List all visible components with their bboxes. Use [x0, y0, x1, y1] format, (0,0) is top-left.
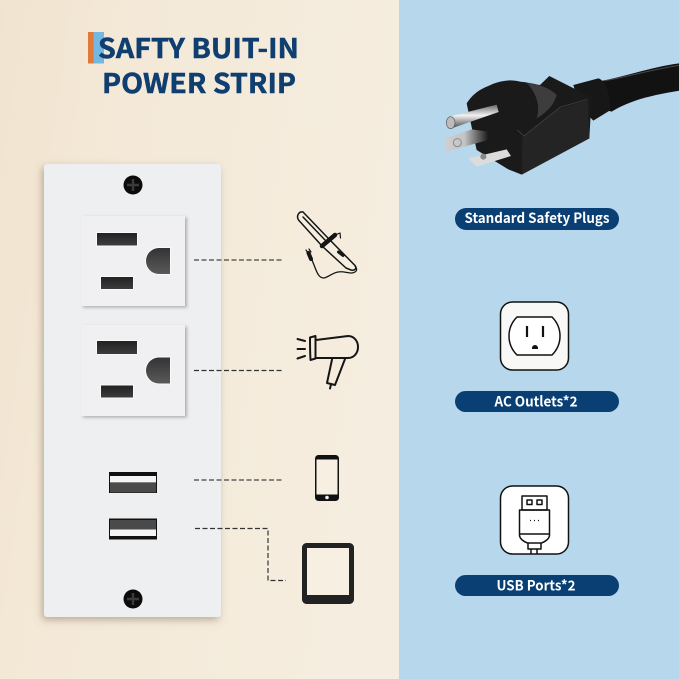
icon: USB connector	[500, 486, 568, 554]
title line 2: POWER STRIP	[102, 62, 296, 101]
top blade	[445, 129, 488, 152]
cord collar	[573, 78, 611, 121]
side face	[522, 100, 589, 175]
outlet 2	[81, 325, 185, 416]
icon: AC outlet	[500, 302, 568, 370]
right background panel	[399, 0, 679, 679]
connector: outlet 2 to hair dryer	[194, 370, 283, 372]
plug head	[467, 76, 592, 175]
outlet 1	[81, 216, 185, 306]
icon: phone	[315, 455, 339, 501]
label: Standard Safety Plugs: Standard Safety Plugs	[464, 208, 610, 228]
bottom screw	[124, 590, 142, 608]
label: AC Outlets*2	[455, 391, 619, 412]
icon: power plug photo	[445, 63, 679, 175]
title	[88, 27, 299, 101]
icon: tablet	[304, 546, 352, 602]
top screw	[124, 176, 142, 194]
connector: USB 1 to phone	[194, 479, 283, 481]
icon: hair dryer	[298, 336, 358, 388]
ground pin	[449, 105, 499, 129]
left background panel	[0, 0, 399, 679]
label: USB Ports*2	[455, 575, 619, 596]
title accent mark	[88, 32, 104, 64]
icon: curling iron	[298, 212, 357, 278]
label: AC Outlets*2: AC Outlets*2	[494, 392, 578, 412]
cord	[598, 63, 679, 112]
USB port 1	[109, 472, 157, 493]
power strip faceplate	[44, 164, 221, 617]
connector: outlet 1 to curling iron	[194, 259, 283, 261]
label: USB Ports*2: USB Ports*2	[496, 576, 576, 596]
connector: USB 2 to tablet	[195, 528, 286, 580]
bottom blade	[468, 149, 511, 167]
title line 1: SAFTY BUIT-IN	[98, 27, 299, 66]
USB port 2	[109, 518, 157, 540]
dome highlight	[527, 83, 557, 118]
